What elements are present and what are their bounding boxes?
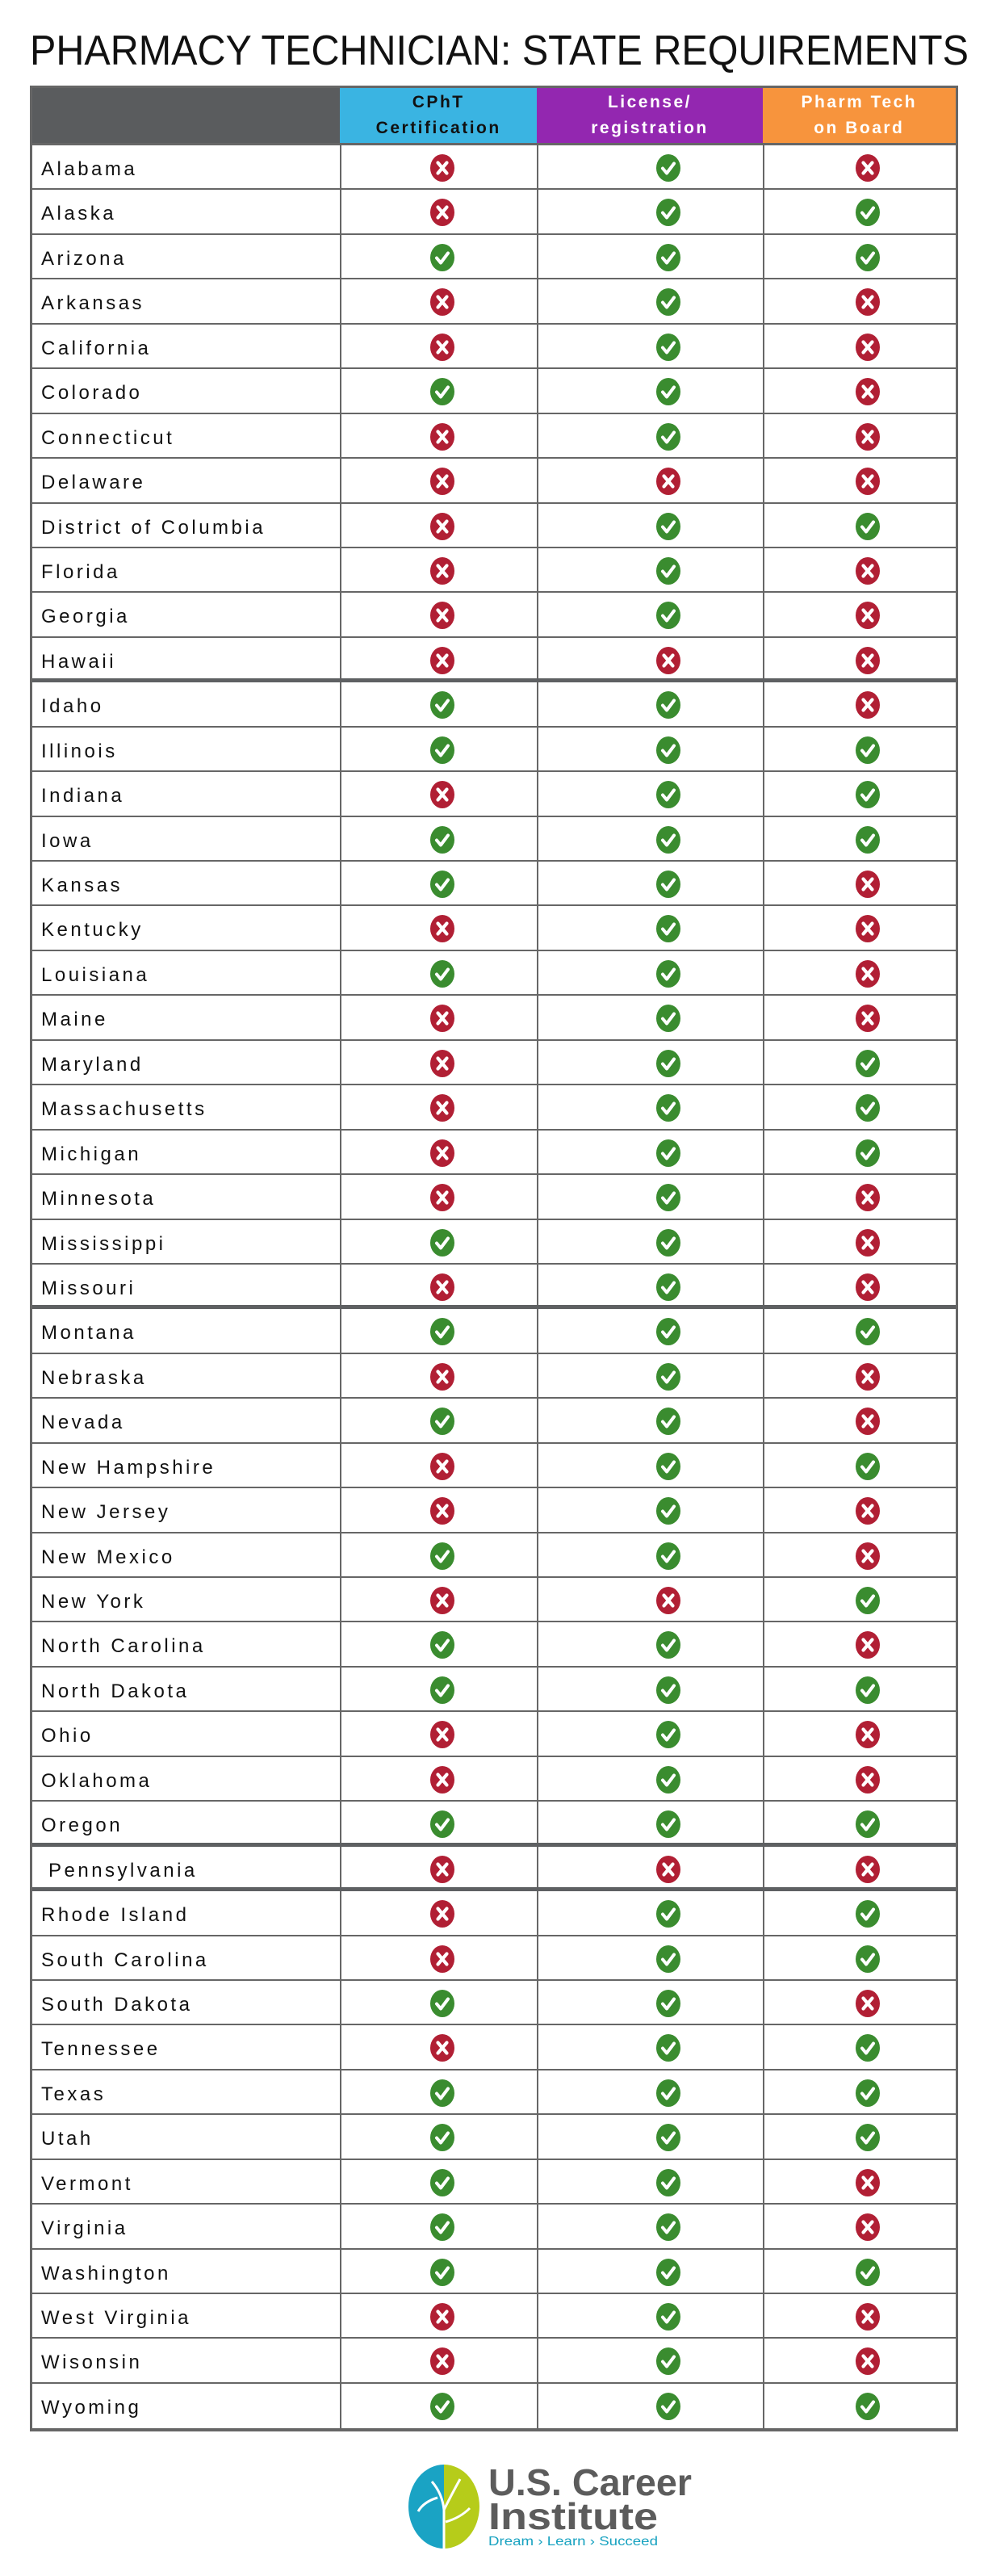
row: Georgia: Georgia	[41, 606, 130, 627]
header row: registration	[591, 119, 709, 137]
row: Oklahoma: Oklahoma	[41, 1770, 152, 1792]
row: Alaska: Alaska	[41, 203, 116, 224]
row: Florida: Florida	[41, 561, 120, 583]
row: New Mexico: New Mexico	[41, 1546, 175, 1568]
row: South Dakota: South Dakota	[41, 1994, 192, 2016]
header row	[32, 88, 956, 145]
row: North Carolina: North Carolina	[41, 1635, 206, 1657]
row: Washington: Washington	[41, 2263, 171, 2284]
row: Texas	[32, 2070, 956, 2115]
row: New York	[32, 1578, 956, 1622]
row: Maryland: Maryland	[41, 1054, 144, 1076]
row: Iowa	[32, 817, 956, 862]
row: Minnesota	[32, 1175, 956, 1219]
row: Virginia	[32, 2205, 956, 2250]
logo text: U.S. Career	[488, 2461, 692, 2503]
row: Kentucky: Kentucky	[41, 919, 144, 941]
row: Maryland	[32, 1041, 956, 1085]
row: New York: New York	[41, 1591, 145, 1613]
row: Arizona: Arizona	[41, 248, 127, 270]
row: Massachusetts	[32, 1085, 956, 1131]
row: North Dakota	[32, 1668, 956, 1712]
row: District of Columbia: District of Columbia	[41, 517, 266, 538]
row: Connecticut	[32, 414, 956, 459]
row: Rhode Island	[32, 1891, 956, 1936]
row: Oregon	[32, 1802, 956, 1847]
row: North Carolina	[32, 1622, 956, 1668]
icon: tree circle	[408, 2465, 479, 2549]
row: Wisonsin: Wisonsin	[41, 2352, 142, 2373]
row: Nevada: Nevada	[41, 1412, 125, 1433]
row: Kentucky	[32, 906, 956, 951]
row: Alabama	[32, 145, 956, 190]
row: Utah	[32, 2115, 956, 2160]
row: New Hampshire: New Hampshire	[41, 1457, 216, 1479]
row: Colorado: Colorado	[41, 382, 142, 404]
row: Nebraska	[32, 1354, 956, 1399]
row: Vermont: Vermont	[41, 2173, 133, 2195]
row: West Virginia	[32, 2294, 956, 2339]
row: Nebraska: Nebraska	[41, 1367, 147, 1389]
row: Tennessee	[32, 2025, 956, 2070]
row: District of Columbia	[32, 504, 956, 548]
row: Maine: Maine	[41, 1009, 108, 1030]
row: Montana: Montana	[41, 1322, 136, 1344]
row: Delaware	[32, 459, 956, 504]
row: Ohio	[32, 1712, 956, 1757]
row: Illinois: Illinois	[41, 740, 118, 762]
row: Washington	[32, 2250, 956, 2294]
row: Michigan	[32, 1131, 956, 1175]
row: South Carolina: South Carolina	[41, 1949, 209, 1970]
header row: CPhT	[412, 93, 465, 111]
row: California	[32, 325, 956, 369]
row: California: California	[41, 338, 151, 359]
row: Tennessee: Tennessee	[41, 2038, 161, 2060]
row: Massachusetts: Massachusetts	[41, 1098, 207, 1120]
row: Nevada	[32, 1399, 956, 1444]
row: Ohio: Ohio	[41, 1725, 94, 1747]
logo: U.S. Career Institute	[408, 2461, 692, 2549]
row: West Virginia: West Virginia	[41, 2307, 191, 2329]
row: New Mexico	[32, 1533, 956, 1578]
row: Wyoming: Wyoming	[41, 2397, 141, 2419]
logo text: Institute	[488, 2495, 658, 2537]
row: Missouri: Missouri	[41, 1278, 136, 1299]
row: Missouri	[32, 1265, 956, 1309]
row: Alaska	[32, 190, 956, 235]
row: Connecticut: Connecticut	[41, 427, 174, 449]
row: Vermont	[32, 2160, 956, 2205]
row: South Dakota	[32, 1981, 956, 2025]
row: New Jersey: New Jersey	[41, 1501, 170, 1523]
row: Louisiana	[32, 951, 956, 996]
row: Indiana: Indiana	[41, 785, 124, 807]
row: New Hampshire	[32, 1444, 956, 1488]
row: North Dakota: North Dakota	[41, 1680, 189, 1702]
row: Michigan: Michigan	[41, 1143, 141, 1165]
row: Rhode Island: Rhode Island	[41, 1904, 189, 1926]
row: Florida	[32, 548, 956, 593]
row: Mississippi: Mississippi	[41, 1232, 166, 1255]
row: Wyoming	[41, 2384, 880, 2428]
row: Pennsylvania	[32, 1847, 956, 1891]
row: Oregon: Oregon	[41, 1815, 123, 1836]
row: Kansas	[32, 862, 956, 906]
row: Delaware: Delaware	[41, 472, 145, 493]
row: Arizona	[32, 235, 956, 279]
row: Iowa: Iowa	[41, 830, 94, 852]
row: Wisonsin	[32, 2339, 956, 2384]
row: Montana	[32, 1309, 956, 1354]
row: Idaho	[32, 682, 956, 728]
row: Illinois	[32, 728, 956, 772]
row: Georgia	[32, 593, 956, 638]
header row: License/	[608, 93, 692, 111]
row: Virginia: Virginia	[41, 2217, 128, 2239]
row: Texas: Texas	[41, 2083, 106, 2105]
row: Minnesota: Minnesota	[41, 1188, 156, 1210]
row: Arkansas	[32, 279, 956, 325]
logo text: Dream › Learn › Succeed	[488, 2535, 658, 2549]
row: Alabama: Alabama	[41, 158, 137, 180]
row: Mississippi	[32, 1219, 956, 1265]
header row: Pharm Tech	[801, 93, 917, 111]
row: Utah: Utah	[41, 2128, 94, 2150]
row: Maine	[32, 996, 956, 1041]
row: Kansas: Kansas	[41, 875, 123, 896]
header row: on Board	[814, 119, 904, 137]
row: Pennsylvania: Pennsylvania	[48, 1860, 198, 1882]
row: Oklahoma	[32, 1757, 956, 1802]
logo text	[488, 2461, 692, 2549]
row: Idaho: Idaho	[41, 695, 104, 717]
row: South Carolina	[32, 1936, 956, 1981]
row: Indiana	[32, 772, 956, 817]
row: Hawaii: Hawaii	[41, 651, 116, 673]
header row: Certification	[376, 119, 501, 137]
row: Arkansas: Arkansas	[41, 292, 144, 314]
row: Hawaii	[32, 638, 956, 682]
row: Colorado	[32, 369, 956, 414]
row: New Jersey	[32, 1488, 956, 1533]
row: Louisiana: Louisiana	[41, 964, 149, 986]
